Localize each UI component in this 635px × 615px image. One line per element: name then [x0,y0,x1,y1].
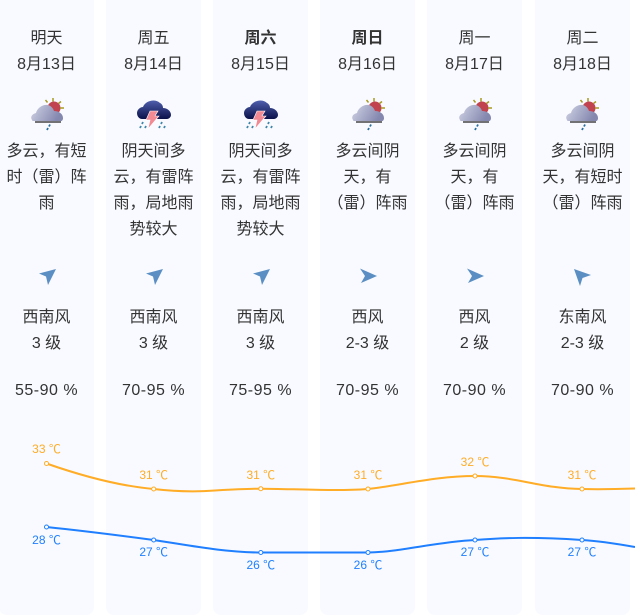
icon: wind direction arrow [360,268,377,283]
high temperature series: 31 ℃ [568,468,596,482]
day 1 humidity: 55-90 % [15,382,78,399]
day 5 date: 周一 [458,30,490,47]
day 6 wind [558,308,606,352]
panel: day 6 forecast [535,0,630,615]
day 5 weather description: 多云间阴 [442,143,506,160]
day 1 weather description: 雨 [38,195,54,212]
day 2 weather description: 势较大 [129,221,178,238]
day 1 date: 8月13日 [17,56,76,73]
day 2 wind: 3 级 [139,335,168,352]
day 6 weather description: 天，有短时 [542,169,622,186]
day 2 wind: 西南风 [129,309,178,326]
low temperature series: 26 ℃ [246,558,275,572]
day 5 wind [458,309,490,352]
day 1 weather description: 时（雷）阵 [6,169,86,186]
day 3 weather description: 云，有雷阵 [220,169,300,186]
day 4 date: 8月16日 [338,56,397,73]
day 2 weather description: 云，有雷阵 [113,169,194,186]
day 2 weather description [113,142,194,238]
day 1 weather description: 多云，有短 [6,143,86,160]
day 6 weather description [542,142,622,212]
panel: day 1 forecast [0,0,94,615]
day 5 wind: 2 级 [460,335,489,352]
day 3 wind: 西南风 [236,309,284,326]
icon: cloudy with shower [566,98,599,130]
day 3 date: 周六 [244,30,276,47]
low temperature series [32,525,635,572]
day 2 weather description: 阴天间多 [121,143,186,160]
day 3 wind [236,308,284,352]
day 1 weather description [6,142,86,212]
high temperature series: 31 ℃ [354,468,382,482]
high temperature series [32,442,635,491]
high temperature series: 31 ℃ [246,468,275,482]
day 1 date [17,30,76,73]
day 3 date: 8月15日 [231,56,290,73]
day 4 weather description: （雷）阵雨 [327,195,408,212]
icon: wind direction arrow [146,269,163,285]
high temperature series: 32 ℃ [461,455,489,469]
day 1 wind: 3 级 [32,335,61,352]
high temperature series: 33 ℃ [32,442,61,456]
panel: day 5 forecast [427,0,522,615]
low temperature series: 28 ℃ [32,533,61,547]
day 1 wind: 西南风 [22,309,70,326]
panel: day 2 forecast [106,0,201,615]
day 6 humidity: 70-90 % [551,382,614,399]
day 6 weather description: （雷）阵雨 [542,195,622,212]
day 5 weather description: 天，有 [450,169,498,186]
low temperature series: 27 ℃ [461,545,489,559]
day 5 humidity: 70-90 % [443,382,506,399]
day 3 humidity: 75-95 % [229,382,292,399]
day 4 weather description: 多云间阴 [335,143,400,160]
day 3 date [231,29,290,73]
day 3 weather description [220,142,300,238]
panel: day 3 forecast [213,0,308,615]
icon: wind direction arrow [574,269,591,286]
day 6 date [553,30,612,73]
day 4 date [338,30,397,73]
day 6 date: 8月18日 [553,56,612,73]
icon: cloudy with shower [459,98,492,130]
day 3 weather description: 雨，局地雨 [220,195,300,212]
day 5 date [445,30,504,73]
icon: wind direction arrow [39,269,56,285]
icon: thunderstorm [137,100,171,128]
low temperature series: 26 ℃ [354,558,382,572]
day 2 wind [129,308,178,352]
day 4 wind: 2-3 级 [346,335,389,352]
low temperature series: 27 ℃ [139,545,168,559]
day 6 weather description: 多云间阴 [550,143,614,160]
day 4 wind [346,309,389,352]
low temperature series: 27 ℃ [568,545,596,559]
day 4 date: 周日 [351,30,384,47]
day 4 weather description [327,142,408,212]
icon: wind direction arrow [467,268,484,283]
day 6 date: 周二 [566,30,598,47]
icon: cloudy with shower [31,98,64,130]
day 2 weather description: 雨，局地雨 [113,195,194,212]
day 5 wind: 西风 [458,309,490,326]
day 3 weather description: 势较大 [236,221,284,238]
day 6 wind: 2-3 级 [561,335,604,352]
day 6 wind: 东南风 [558,309,606,326]
day 4 weather description: 天，有 [343,169,392,186]
icon: wind direction arrow [253,269,270,285]
icon: cloudy with shower [352,98,385,130]
day 5 date: 8月17日 [445,56,504,73]
day 2 humidity: 70-95 % [122,382,185,399]
icon: thunderstorm [244,100,278,128]
day 5 weather description [434,142,514,212]
day 4 wind: 西风 [351,309,384,326]
day 2 date [124,30,183,73]
day 5 weather description: （雷）阵雨 [434,195,514,212]
day 2 date: 周五 [137,30,170,47]
panel: day 4 forecast [320,0,415,615]
day 3 wind: 3 级 [246,335,275,352]
day 4 humidity: 70-95 % [336,382,399,399]
day 1 date: 明天 [30,30,62,47]
day 1 wind [22,308,70,352]
day 3 weather description: 阴天间多 [228,143,292,160]
high temperature series: 31 ℃ [139,468,168,482]
day 2 date: 8月14日 [124,56,183,73]
